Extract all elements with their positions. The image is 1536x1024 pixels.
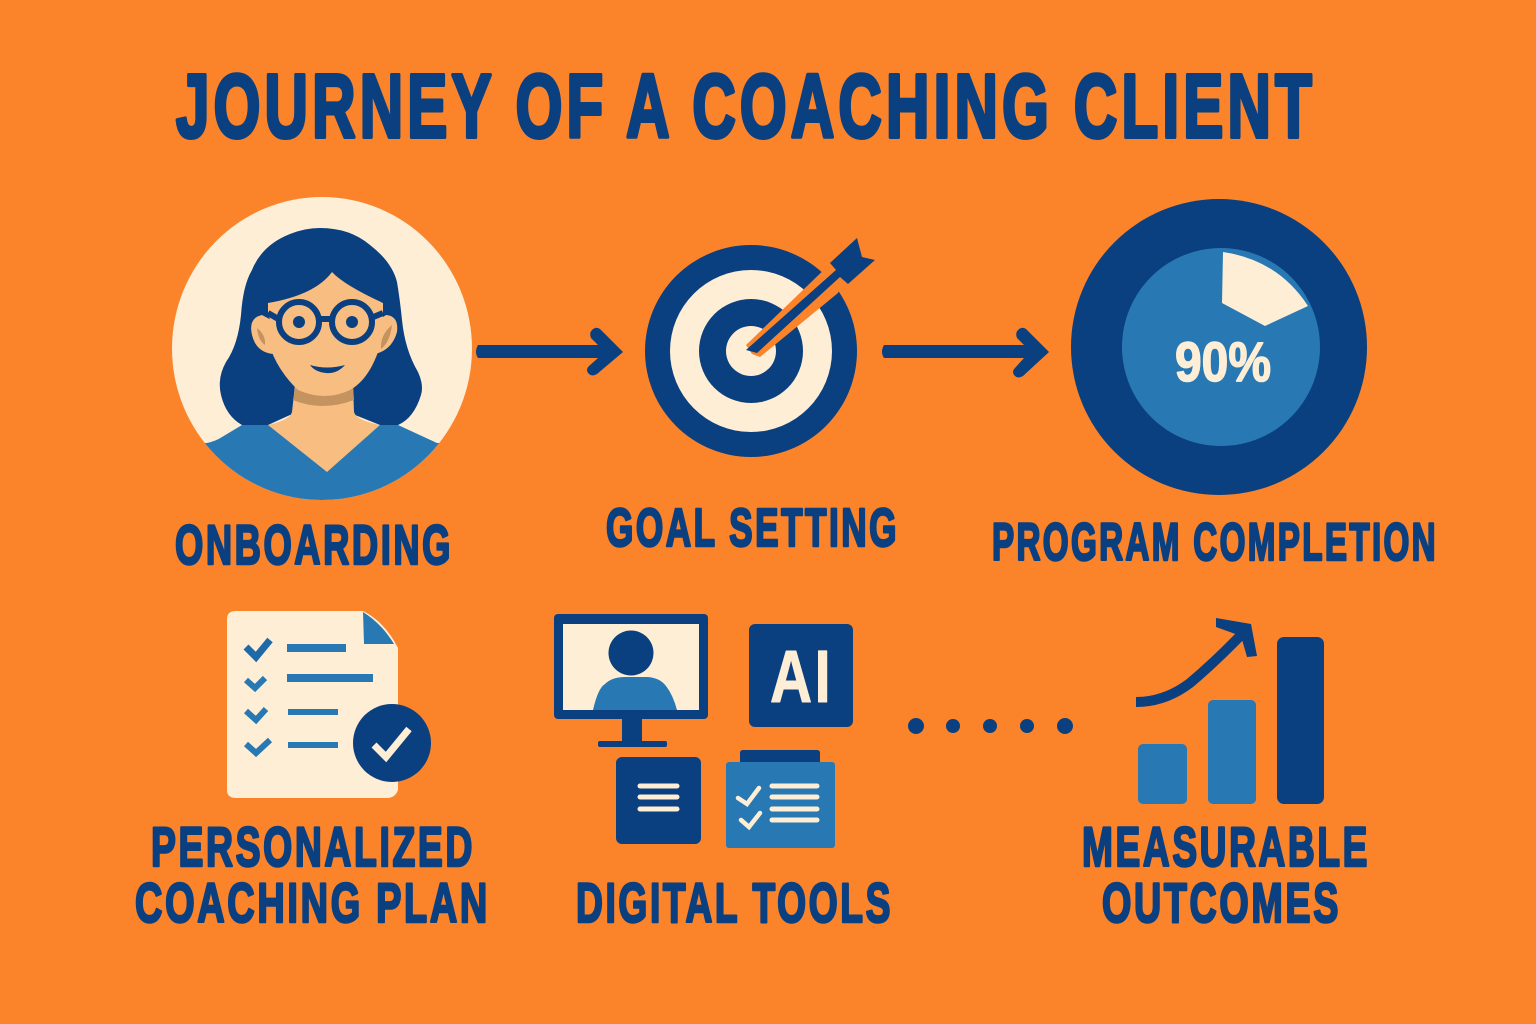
neck and chest	[268, 385, 380, 472]
shirt	[204, 425, 440, 500]
icon: target with arrow	[645, 238, 875, 457]
label: goal setting: GOAL SETTING	[606, 498, 899, 558]
arrow: goal setting to completion	[882, 328, 1049, 378]
neck shadow	[293, 385, 354, 406]
ears	[251, 315, 282, 354]
label: personalized coaching plan: COACHING PLAN	[135, 871, 490, 934]
mouth	[310, 365, 345, 373]
label: digital tools: DIGITAL TOOLS	[576, 871, 893, 934]
face	[268, 272, 383, 396]
arrow: onboarding to goal setting	[476, 328, 623, 376]
label: personalized coaching plan	[135, 815, 490, 934]
label: onboarding: ONBOARDING	[175, 513, 453, 576]
hair	[220, 228, 422, 425]
icon: checklist document	[227, 611, 431, 798]
value: 90%: 90%	[1175, 330, 1271, 393]
label: measurable outcomes	[1082, 815, 1370, 934]
dotted connector	[908, 718, 1073, 734]
glasses	[279, 302, 319, 342]
label: measurable outcomes: OUTCOMES	[1102, 871, 1341, 934]
chart: measurable outcomes bars and trend arrow	[1136, 618, 1324, 804]
label: personalized coaching plan: PERSONALIZED	[151, 815, 475, 878]
icon: checklist folder	[726, 750, 835, 848]
icon: video call monitor	[554, 614, 708, 747]
chart: 90% program completion donut	[1071, 199, 1367, 495]
icon: onboarding client portrait	[172, 197, 472, 510]
icon: AI tile: AI	[770, 635, 833, 718]
label: measurable outcomes: MEASURABLE	[1082, 815, 1370, 878]
icon: document tile	[616, 757, 701, 844]
icon: AI tile	[749, 624, 853, 727]
